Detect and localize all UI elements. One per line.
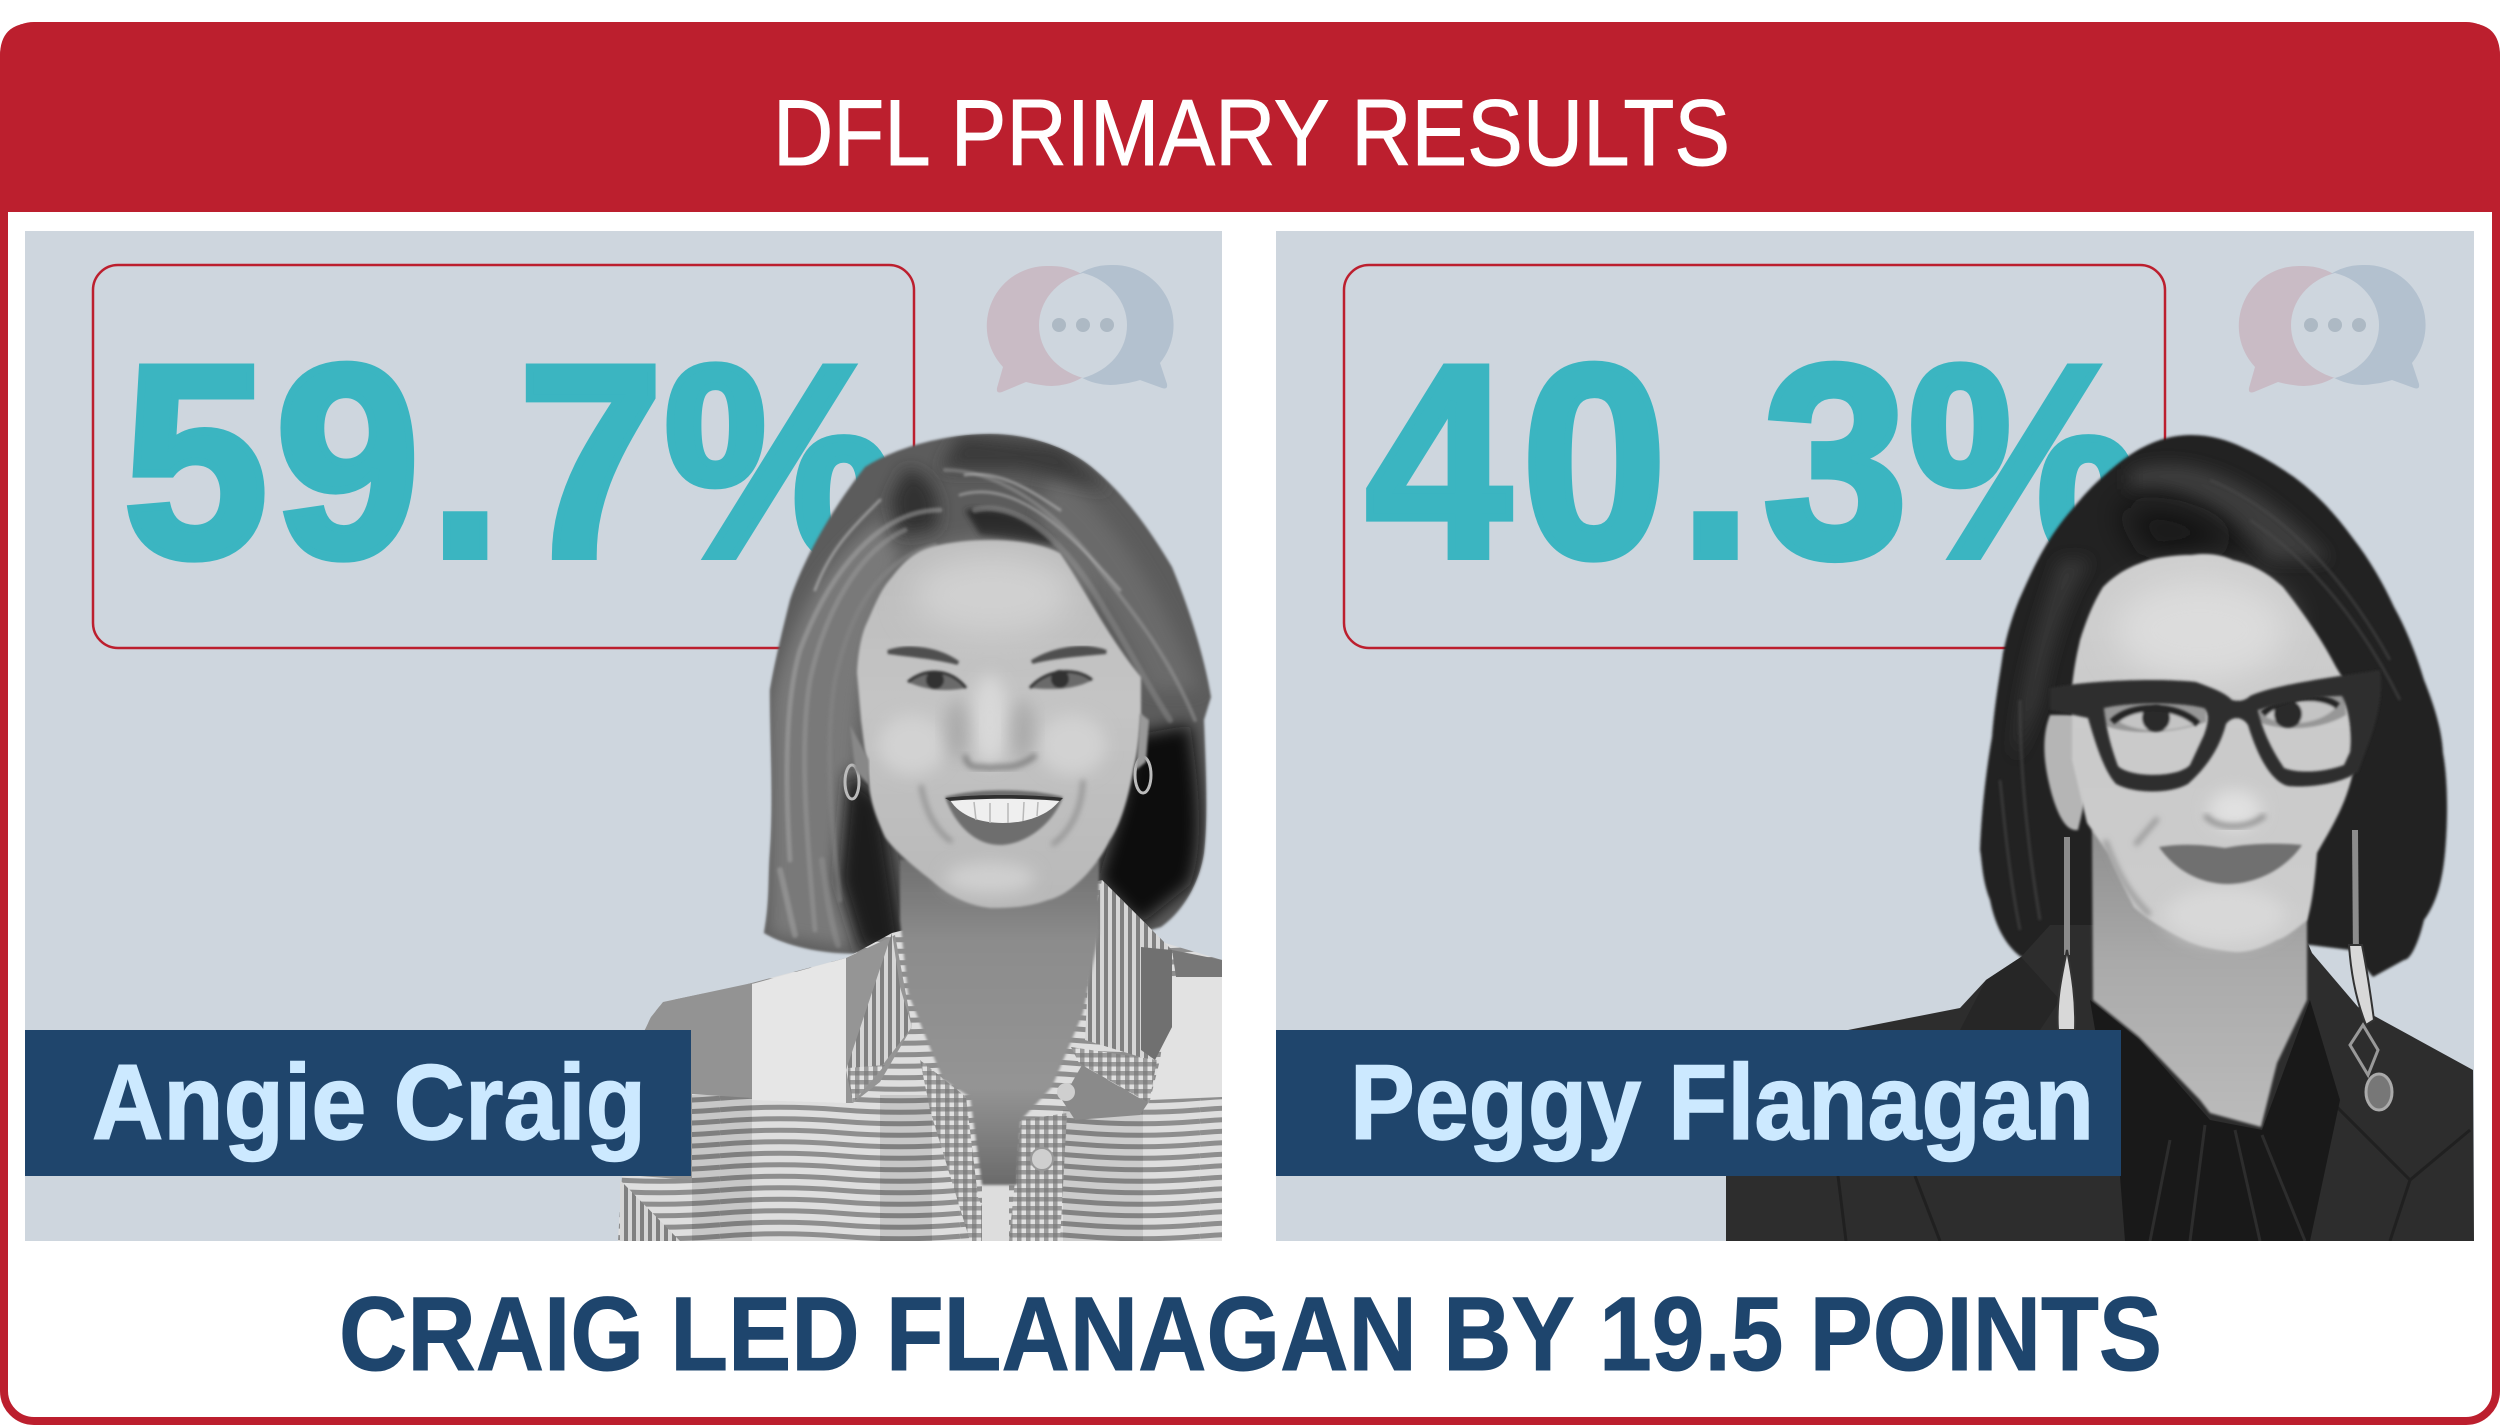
blouse bbox=[2090, 1000, 2340, 1241]
icon: speech bubbles bbox=[2239, 265, 2426, 392]
portrait: Peggy Flanagan bbox=[1276, 435, 2474, 1241]
glasses bbox=[2050, 670, 2381, 792]
Flanagan vote share: 40.3% bbox=[1366, 308, 2140, 614]
callout box: Craig percentage bbox=[93, 265, 914, 648]
face bbox=[2050, 554, 2392, 1110]
lips bbox=[2159, 844, 2302, 884]
eyes bbox=[2103, 690, 2346, 732]
header band bbox=[0, 23, 2500, 212]
hair bbox=[764, 434, 1211, 953]
portrait: Angie Craig bbox=[618, 434, 1222, 1241]
name bar: Peggy Flanagan: Peggy Flanagan bbox=[1350, 1042, 2094, 1162]
earrings bbox=[2058, 830, 2392, 1110]
blouse folds bbox=[2150, 1125, 2305, 1241]
neck bbox=[2092, 830, 2307, 1127]
name bar: Angie Craig: Angie Craig bbox=[92, 1042, 646, 1162]
icon: speech bubbles bbox=[987, 265, 1174, 392]
panel: Angie Craig bbox=[25, 231, 1222, 1241]
smile bbox=[945, 790, 1063, 845]
eyebrows and eyes bbox=[888, 648, 1106, 690]
jacket bbox=[1726, 925, 2474, 1241]
callout box: Flanagan percentage bbox=[1344, 265, 2165, 648]
ear bbox=[2044, 715, 2085, 830]
nose bbox=[2205, 815, 2265, 826]
panel background bbox=[1276, 231, 2474, 1241]
panel background bbox=[25, 231, 1222, 1241]
shirt bbox=[618, 880, 1222, 1241]
title: DFL PRIMARY RESULTS bbox=[773, 80, 1730, 185]
Craig vote share: 59.7% bbox=[123, 308, 895, 614]
hair bbox=[1980, 435, 2447, 977]
footer summary: CRAIG LED FLANAGAN BY 19.5 POINTS bbox=[339, 1276, 2162, 1393]
face bbox=[845, 540, 1151, 908]
panel: Peggy Flanagan bbox=[339, 231, 2474, 1393]
neck bbox=[900, 860, 1099, 1185]
nose bbox=[965, 755, 1036, 768]
earrings bbox=[845, 757, 1151, 799]
